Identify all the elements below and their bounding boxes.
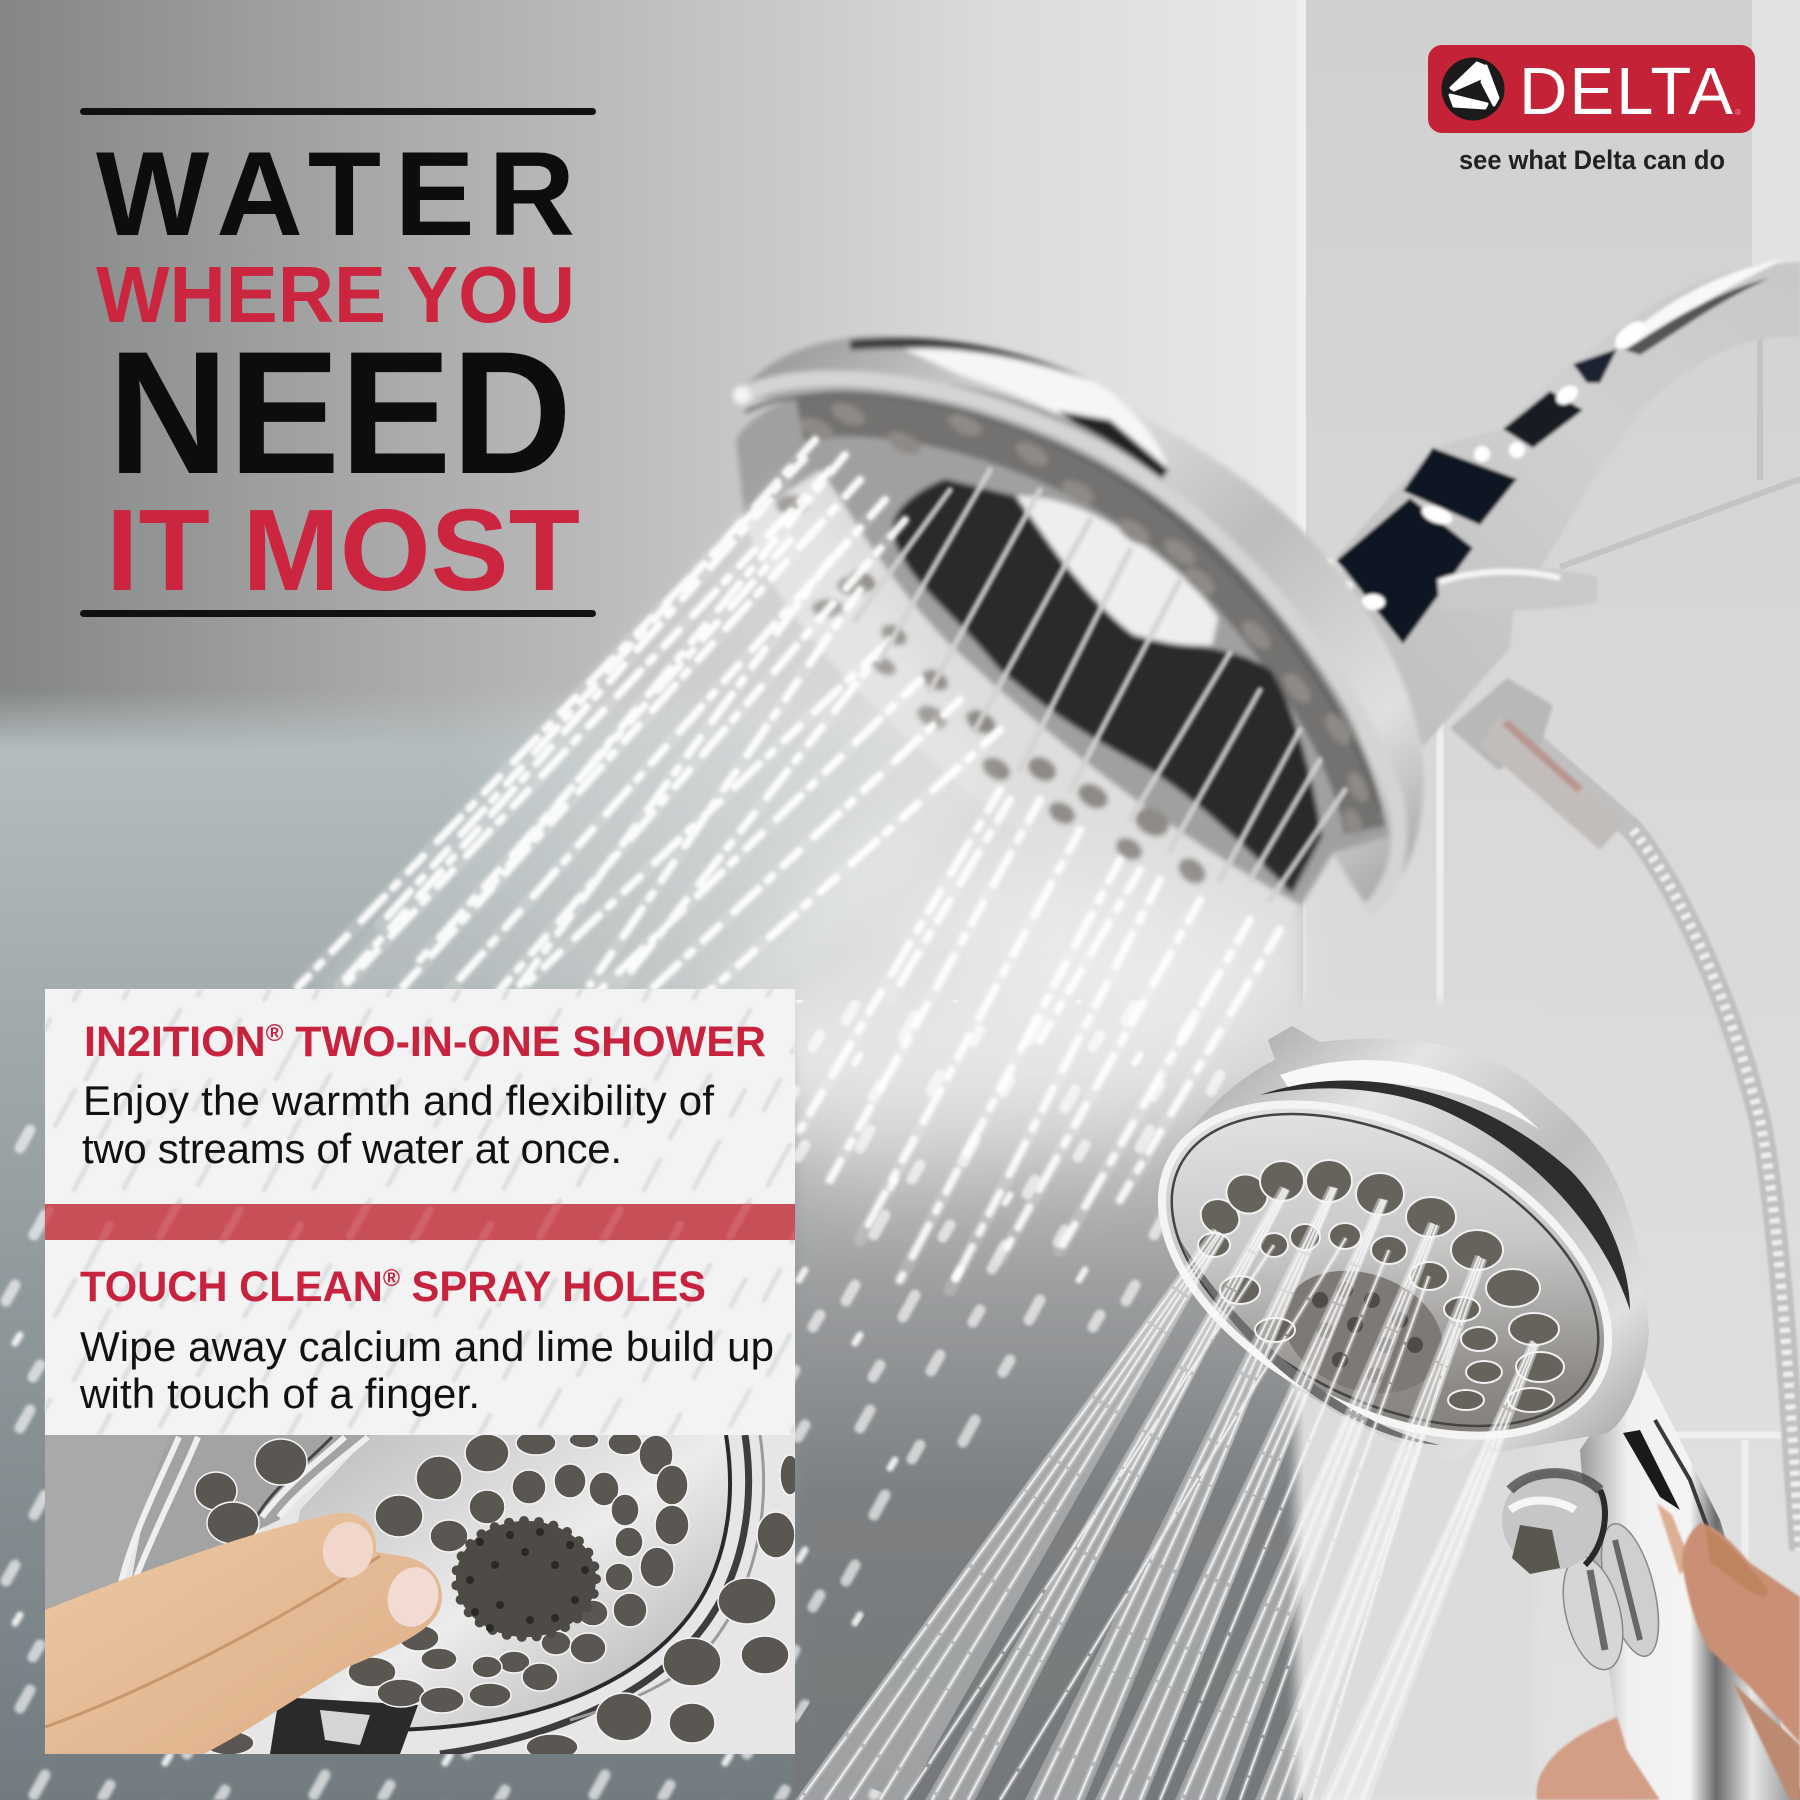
palm — [1733, 1683, 1800, 1800]
rim — [736, 379, 1399, 912]
panel background — [45, 989, 795, 1435]
title line: NEED: NEED — [108, 316, 572, 511]
panel: features — [45, 989, 795, 1435]
dark chrome fitting — [270, 1697, 418, 1754]
lower lip plate — [745, 470, 1300, 929]
heading: In2ition: ® — [266, 1020, 284, 1047]
fingers — [45, 1513, 445, 1754]
text: In2ition description — [82, 1077, 714, 1172]
inset photo: finger wiping spray holes — [45, 1431, 800, 1760]
heading: In2ition: TWO-IN-ONE SHOWER — [283, 1018, 766, 1066]
dark reflections — [1403, 448, 1517, 525]
spray holes — [195, 1431, 800, 1760]
stream bundles — [795, 1186, 1540, 1800]
upper shower head — [733, 336, 1424, 929]
fine stream lines — [800, 1187, 1537, 1800]
hand shower head — [1108, 1026, 1662, 1504]
shower dish — [297, 1435, 730, 1730]
spray face — [1108, 1036, 1662, 1504]
text: In2ition description: two streams of water at once. — [82, 1125, 622, 1172]
lever tab — [1437, 567, 1597, 611]
hand shower water streams — [795, 1186, 1540, 1800]
levers — [1590, 1518, 1670, 1662]
logo wordmark: DELTA — [1519, 54, 1733, 129]
veil of left water streams — [300, 470, 1000, 1000]
icon: Delta triangle mark — [1442, 58, 1504, 120]
title line: WATER: WATER — [96, 127, 575, 261]
title line: WHERE YOU: WHERE YOU — [96, 250, 575, 339]
hand shower handle — [1502, 1360, 1800, 1800]
white reflection gap — [1016, 496, 1218, 646]
dark interior reflection — [892, 479, 1322, 894]
text: Touch Clean description: with touch of a finger. — [79, 1370, 480, 1417]
red divider band — [45, 1204, 795, 1240]
title block — [80, 108, 596, 617]
upper shower water streams — [298, 440, 1345, 1290]
dome highlight — [904, 348, 1169, 470]
text: In2ition description: Enjoy the warmth and flexibility of — [83, 1077, 714, 1124]
thumb — [1536, 1717, 1660, 1800]
main finger — [1682, 1523, 1800, 1743]
hand holding the shower — [1536, 1503, 1800, 1800]
text: Touch Clean description — [79, 1323, 774, 1417]
chrome back shell — [736, 336, 1424, 912]
heading: Touch Clean: ® — [383, 1265, 400, 1292]
center nozzle cluster — [1266, 1249, 1460, 1415]
center spray cluster — [456, 1521, 596, 1637]
sparkles — [1323, 317, 1650, 610]
heading: Touch Clean: SPRAY HOLES — [400, 1263, 706, 1311]
top rule — [80, 108, 596, 115]
logo badge — [1428, 45, 1755, 133]
Delta logo — [1428, 45, 1755, 175]
spray face — [736, 382, 1389, 929]
hose — [1510, 722, 1800, 1550]
chrome arm — [1337, 262, 1800, 747]
nozzles — [776, 398, 1372, 889]
hose cradle — [1450, 678, 1553, 770]
water droplets falling across tub — [0, 1000, 1226, 1800]
arm highlight — [1617, 259, 1785, 350]
registered mark: ® — [1735, 108, 1741, 117]
large spray nozzles — [1194, 1192, 1246, 1242]
chrome shell — [1158, 1026, 1649, 1460]
text: Touch Clean description: Wipe away calcium and lime build up — [80, 1323, 774, 1370]
knob — [1502, 1470, 1602, 1570]
bright water veil under upper head — [700, 820, 1290, 1190]
heading: In2ition: IN2ITION — [84, 1018, 266, 1066]
bottom rule — [80, 610, 596, 617]
heading: Touch Clean: TOUCH CLEAN — [80, 1263, 392, 1311]
shower arm and bracket — [1323, 259, 1800, 850]
tagline: see what Delta can do — [1459, 145, 1725, 175]
small fingertip — [1657, 1503, 1690, 1575]
title line: IT MOST: IT MOST — [106, 485, 580, 615]
